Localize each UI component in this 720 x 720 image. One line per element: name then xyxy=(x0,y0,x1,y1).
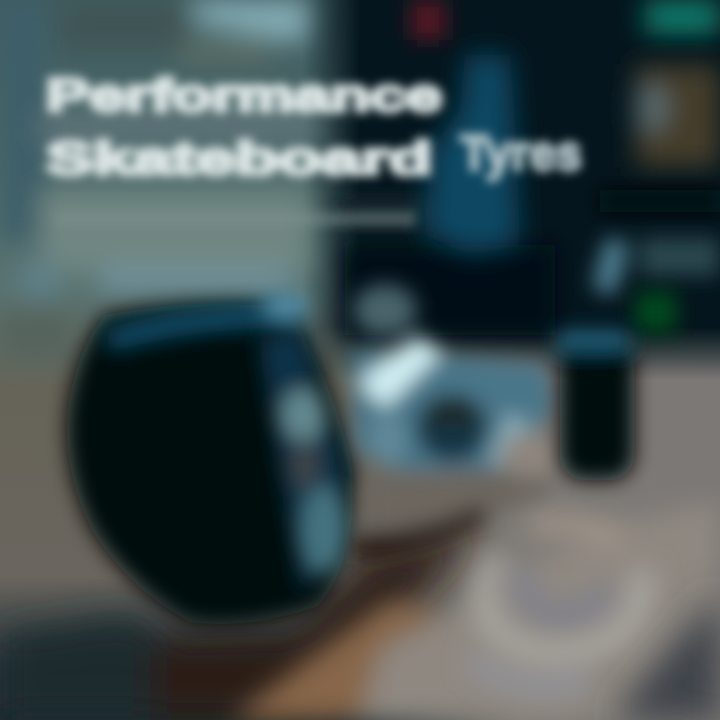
wooden floor strip xyxy=(230,500,720,720)
title: Skateboard xyxy=(46,132,432,184)
floor swirl xyxy=(470,524,642,687)
floor xyxy=(0,530,480,720)
dark floor corner xyxy=(610,590,720,720)
truck axle xyxy=(350,284,560,565)
dark edge xyxy=(600,190,720,212)
small wheel xyxy=(556,330,634,480)
wall behind the title xyxy=(0,0,320,360)
title last word: Tyres xyxy=(460,125,582,181)
title xyxy=(46,69,442,184)
wheel tread top xyxy=(105,305,300,352)
dark right side of the wall xyxy=(345,200,555,335)
wheel rim xyxy=(258,294,349,590)
olive box xyxy=(635,65,720,167)
green light xyxy=(636,292,676,332)
upper right background objects xyxy=(410,0,720,332)
red light xyxy=(410,0,446,40)
grey blue panel xyxy=(591,236,720,297)
faint subtitle band xyxy=(55,212,415,226)
teal light xyxy=(645,0,720,34)
title: Performance xyxy=(46,69,442,121)
big wheel xyxy=(67,294,353,624)
blue column xyxy=(425,55,520,255)
